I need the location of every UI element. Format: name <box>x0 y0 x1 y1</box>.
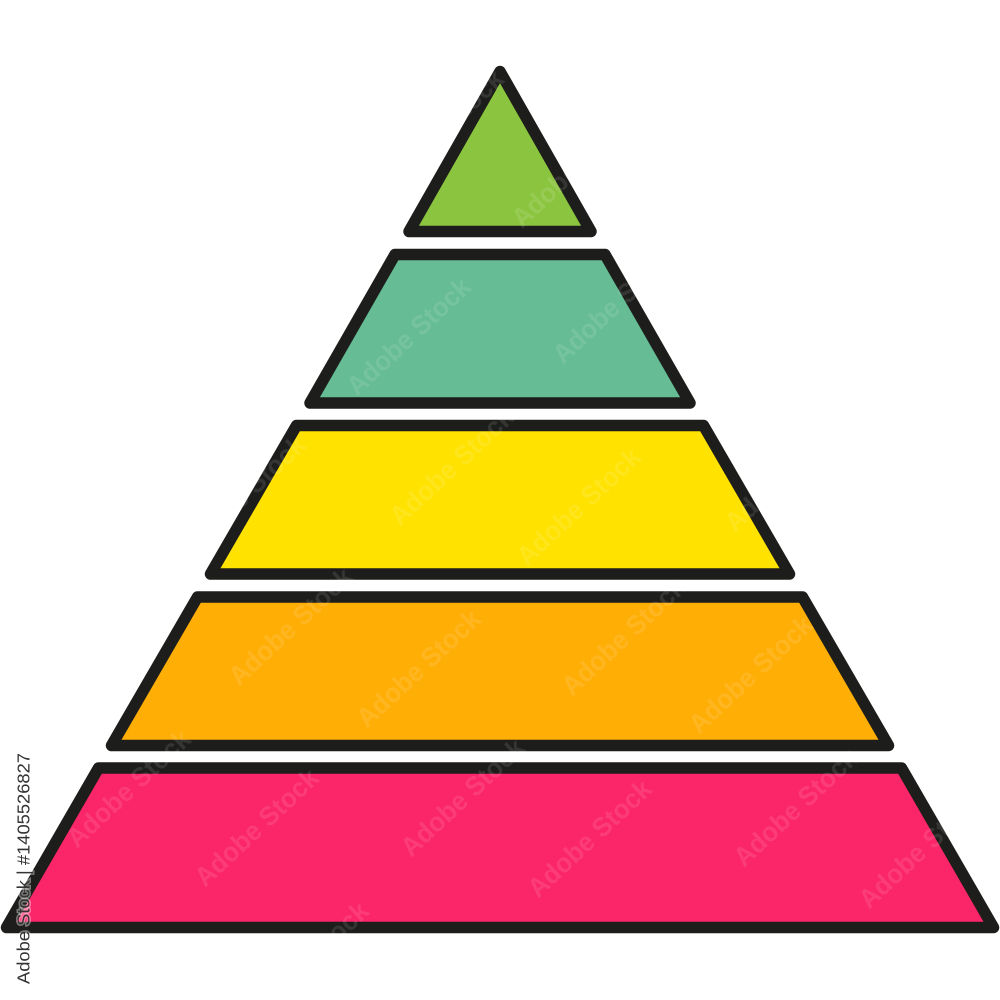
tier 4: orange trapezoid <box>112 597 888 746</box>
watermark pattern: Adobe Stock <box>395 732 531 862</box>
watermark pattern: Adobe Stock <box>384 401 520 531</box>
tier 2: teal trapezoid <box>310 254 690 403</box>
watermark pattern: Adobe Stock <box>341 271 477 401</box>
watermark pattern: Adobe Stock <box>43 55 179 185</box>
watermark pattern: Adobe Stock <box>506 103 642 233</box>
watermark pattern: Adobe Stock <box>708 75 844 205</box>
tier 1: green triangle <box>409 72 591 232</box>
watermark pattern: Adobe Stock <box>843 451 979 581</box>
watermark pattern: Adobe Stock <box>61 723 197 853</box>
watermark pattern: Adobe Stock <box>556 571 692 701</box>
watermark pattern: Adobe Stock <box>374 63 510 193</box>
stock id side text: Adobe Stock | #1405526827 <box>14 753 34 984</box>
watermark pattern: Adobe Stock <box>511 441 647 571</box>
watermark pattern: Adobe Stock <box>833 117 969 247</box>
watermark pattern: Adobe Stock <box>522 773 658 903</box>
watermark pattern: Adobe Stock <box>719 407 855 537</box>
watermark pattern: Adobe Stock <box>853 784 989 914</box>
tier 3: yellow trapezoid <box>210 426 790 574</box>
watermark pattern: Adobe Stock <box>176 429 312 559</box>
watermark pattern: Adobe Stock <box>683 609 819 739</box>
watermark pattern: Adobe Stock <box>547 239 683 369</box>
tier 5: pink trapezoid <box>6 768 994 928</box>
watermark pattern: Adobe Stock <box>8 260 144 390</box>
watermark pattern: Adobe Stock <box>216 227 352 357</box>
watermark pattern: Adobe Stock <box>728 742 864 872</box>
watermark pattern: Adobe Stock <box>676 269 812 399</box>
watermark pattern: Adobe Stock <box>189 762 325 892</box>
watermark pattern: Adobe Stock <box>18 593 154 723</box>
watermark pattern: Adobe Stock <box>51 389 187 519</box>
watermark pattern: Adobe Stock <box>223 561 359 691</box>
watermark pattern: Adobe Stock <box>169 95 305 225</box>
watermark pattern: Adobe Stock <box>351 603 487 733</box>
